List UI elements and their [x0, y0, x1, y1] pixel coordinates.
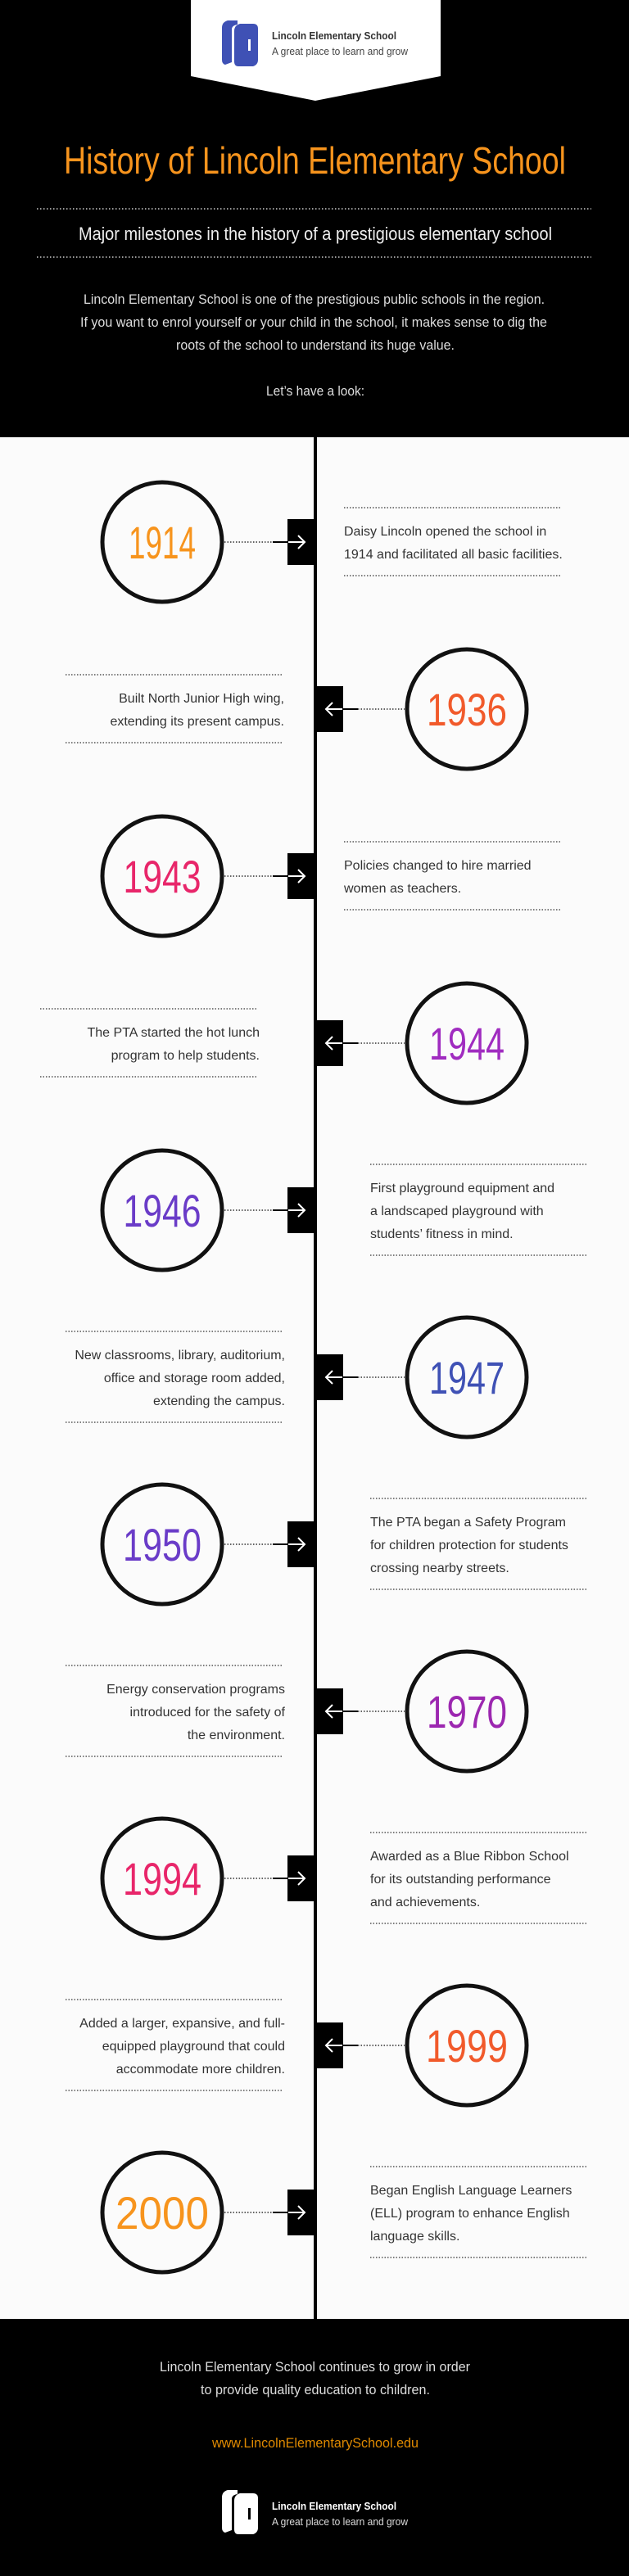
milestone 1994: for its outstanding performance — [370, 1873, 551, 1887]
timeline background — [0, 437, 629, 2319]
milestone 1950: The PTA began a Safety Program — [370, 1516, 566, 1530]
milestone 1944: 1944 — [429, 1018, 505, 1069]
footer text — [160, 2359, 470, 2397]
milestone 1950: for children protection for students — [370, 1539, 568, 1552]
milestone 1943: Policies changed to hire married — [344, 859, 532, 873]
intro paragraph: Let’s have a look: — [266, 383, 364, 399]
milestone 2000: language skills. — [370, 2230, 459, 2244]
milestone 1936: Built North Junior High wing, — [119, 692, 284, 706]
icon: books white — [222, 2490, 258, 2534]
milestone 1970: the environment. — [188, 1729, 285, 1742]
milestone 2000: Began English Language Learners — [370, 2184, 572, 2198]
footer logo: Lincoln Elementary School — [272, 2500, 396, 2512]
milestone 1970: introduced for the safety of — [130, 1706, 286, 1720]
subtitle: Major milestones in the history of a prestigious elementary school — [79, 224, 552, 244]
milestone 1994: 1994 — [123, 1853, 201, 1905]
milestone 1944 — [40, 983, 527, 1103]
milestone 1994: and achievements. — [370, 1896, 480, 1909]
milestone 1914 — [102, 482, 563, 602]
milestone 1947: 1947 — [429, 1352, 505, 1403]
milestone 1944: The PTA started the hot lunch — [87, 1026, 260, 1040]
milestone 1914: Daisy Lincoln opened the school in — [344, 525, 546, 539]
milestone 2000: (ELL) program to enhance English — [370, 2207, 570, 2221]
milestone 1943: 1943 — [123, 851, 201, 902]
milestone 1950: 1950 — [123, 1519, 201, 1570]
milestone 1947: office and storage room added, — [104, 1372, 285, 1385]
milestone 1999: Added a larger, expansive, and full- — [79, 2017, 285, 2031]
logo text — [272, 29, 409, 57]
milestone 1947 — [66, 1317, 527, 1437]
footer text: Lincoln Elementary School continues to grow in order — [160, 2359, 470, 2375]
milestone 1914: 1914 and facilitated all basic facilities. — [344, 548, 563, 562]
footer text: to provide quality education to children. — [201, 2382, 430, 2397]
milestone 1936: 1936 — [427, 684, 507, 735]
milestone 1946: 1946 — [123, 1185, 201, 1236]
intro paragraph: Lincoln Elementary School is one of the prestigious public schools in the region. — [84, 291, 545, 307]
milestone 1946: students’ fitness in mind. — [370, 1227, 514, 1241]
milestone 2000: 2000 — [115, 2187, 209, 2239]
milestone 1999 — [66, 1986, 527, 2105]
timeline center line — [314, 437, 317, 2319]
intro paragraph — [80, 291, 547, 399]
footer background — [0, 2319, 629, 2576]
milestone 1936: extending its present campus. — [110, 715, 284, 729]
milestone 1944: program to help students. — [111, 1049, 260, 1063]
milestone 1914: 1914 — [129, 517, 196, 568]
milestone 1943 — [102, 816, 562, 936]
milestone 1970: Energy conservation programs — [106, 1683, 285, 1697]
milestone 1999: accommodate more children. — [116, 2063, 285, 2077]
footer url: www.LincolnElementarySchool.edu — [211, 2435, 419, 2451]
milestone 1994 — [102, 1819, 588, 1938]
milestone 1947: New classrooms, library, auditorium, — [75, 1349, 285, 1363]
footer logo — [222, 2490, 409, 2534]
logo text: A great place to learn and grow — [272, 45, 409, 57]
milestone 1936 — [66, 649, 527, 769]
milestone 1970: 1970 — [427, 1686, 507, 1738]
milestone 1946: a landscaped playground with — [370, 1204, 544, 1218]
milestone 1950: crossing nearby streets. — [370, 1561, 509, 1575]
header background — [0, 0, 629, 437]
milestone 1970 — [66, 1652, 527, 1771]
intro paragraph: roots of the school to understand its huge value. — [176, 337, 455, 353]
milestone 1943: women as teachers. — [343, 882, 461, 896]
milestone 1946 — [102, 1150, 588, 1270]
milestone 1999: 1999 — [426, 2020, 508, 2072]
milestone 1947: extending the campus. — [153, 1394, 285, 1408]
footer logo: A great place to learn and grow — [272, 2515, 409, 2528]
milestone 1994: Awarded as a Blue Ribbon School — [370, 1850, 569, 1864]
logo text: Lincoln Elementary School — [272, 29, 396, 42]
logo banner — [191, 0, 441, 101]
icon: books — [222, 20, 258, 66]
milestone 2000 — [102, 2153, 588, 2272]
milestone 1946: First playground equipment and — [370, 1182, 554, 1195]
intro paragraph: If you want to enrol yourself or your child in the school, it makes sense to dig the — [80, 314, 547, 330]
milestone 1950 — [102, 1485, 588, 1604]
milestone 1999: equipped playground that could — [102, 2040, 285, 2054]
